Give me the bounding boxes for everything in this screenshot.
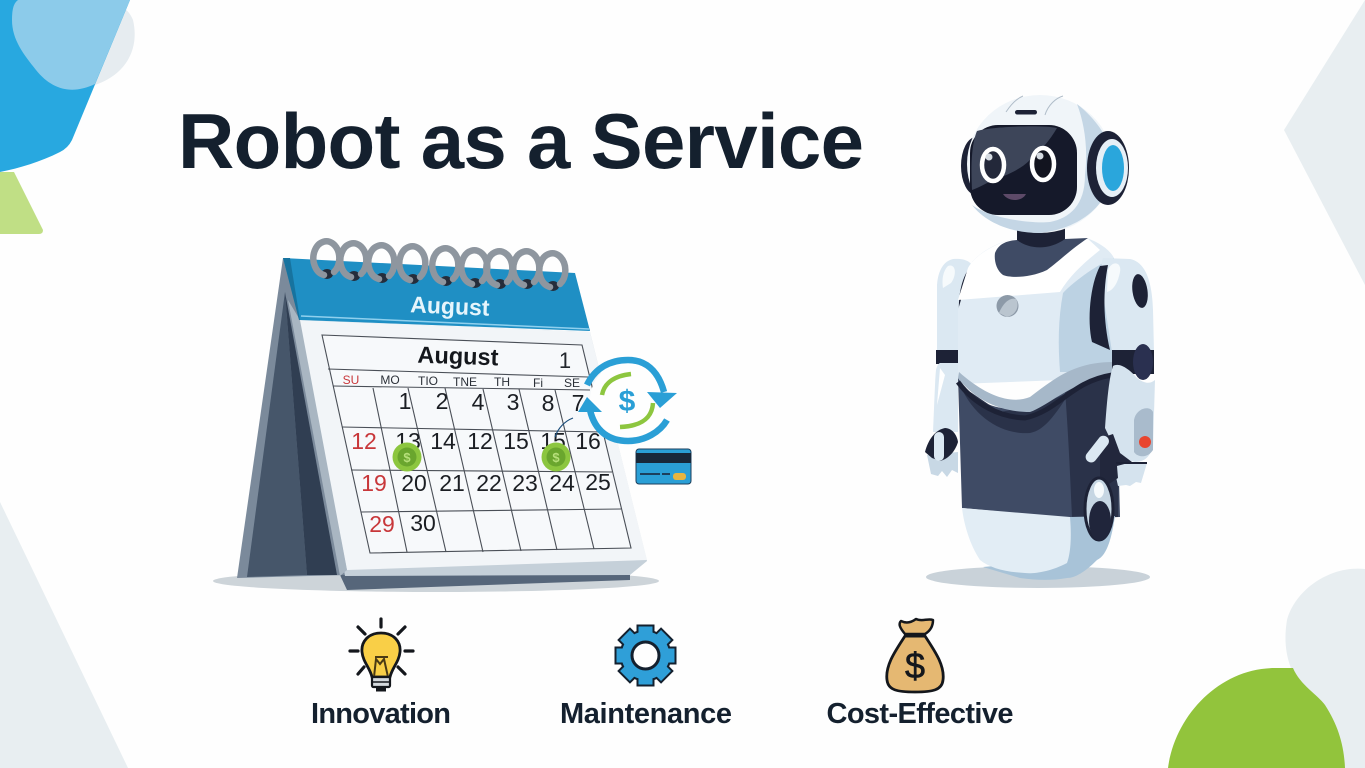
robot torso — [958, 238, 1114, 384]
robot illustration — [925, 95, 1155, 588]
calendar dates: 25 — [585, 469, 611, 495]
calendar dates: 15 — [540, 428, 566, 454]
calendar dates: 19 — [361, 470, 387, 496]
weekday labels: SE — [564, 376, 580, 390]
calendar dates: 2 — [436, 388, 448, 414]
robot left arm — [933, 259, 973, 432]
calendar dates: 23 — [512, 470, 538, 496]
weekday labels: MO — [380, 373, 400, 387]
calendar dates: 21 — [439, 470, 465, 496]
robot head — [961, 95, 1129, 233]
skirt dark side — [1065, 375, 1120, 518]
robot ear — [1087, 131, 1129, 205]
recurring payment icon — [578, 360, 677, 441]
calendar month heading: August — [417, 342, 499, 370]
calendar dates: 8 — [542, 390, 554, 416]
icon: money bag — [887, 619, 943, 692]
payment coin one — [392, 442, 422, 472]
calendar page number: 1 — [559, 348, 571, 373]
payment coin one: $ — [403, 450, 411, 465]
feature: maintenance — [560, 626, 732, 730]
calendar dates: 3 — [507, 389, 519, 415]
robot left hand — [925, 428, 958, 477]
top-right corner decoration — [1284, 0, 1365, 285]
calendar shadow — [213, 570, 659, 592]
icon: light bulb — [350, 619, 413, 692]
robot wheel — [1085, 478, 1113, 541]
robot smile — [1003, 194, 1026, 200]
robot right forearm — [1105, 365, 1155, 462]
robot collar — [995, 238, 1088, 277]
recurring payment icon: $ — [619, 385, 636, 418]
calendar dates: 30 — [410, 510, 436, 536]
robot right eye — [1032, 148, 1054, 180]
feature: innovation — [311, 619, 451, 730]
bottom-right corner decoration — [1168, 569, 1365, 768]
calendar dates: 29 — [369, 511, 395, 537]
icon: money bag: $ — [905, 645, 925, 686]
robot neck — [1017, 228, 1065, 249]
icon: gear — [616, 626, 674, 684]
calendar dates: 12 — [351, 428, 377, 454]
calendar dates: 4 — [472, 389, 485, 415]
calendar spiral rings — [313, 241, 565, 291]
label: cost-effective: Cost-Effective — [826, 698, 1014, 730]
label: maintenance: Maintenance — [560, 698, 732, 730]
robot left eye — [982, 149, 1004, 181]
calendar dates — [351, 388, 611, 537]
label: innovation: Innovation — [311, 698, 451, 730]
bottom-left corner decoration — [0, 502, 128, 768]
weekday labels: TIO — [418, 374, 438, 388]
title: Robot as a Service — [178, 97, 864, 185]
robot skirt — [958, 372, 1120, 518]
calendar dates: 15 — [503, 428, 529, 454]
calendar illustration — [213, 241, 691, 592]
payment pointer line — [555, 418, 573, 437]
payment coin two — [542, 442, 570, 472]
torso side shading — [1059, 258, 1114, 372]
robot right hand — [1083, 433, 1147, 490]
weekday labels — [343, 373, 580, 390]
calendar blue header — [283, 258, 590, 331]
calendar dates: 16 — [575, 428, 601, 454]
calendar page base — [288, 300, 647, 590]
calendar dates: 14 — [430, 428, 456, 454]
weekday labels: TNE — [453, 375, 477, 389]
calendar grid — [322, 335, 631, 553]
calendar dates: 22 — [476, 470, 502, 496]
chest button — [996, 295, 1018, 317]
calendar dates: 20 — [401, 470, 427, 496]
robot ground shadow — [926, 566, 1150, 588]
weekday labels: SU — [343, 373, 359, 387]
feature: cost-effective — [826, 619, 1014, 730]
weekday labels: TH — [494, 375, 510, 389]
calendar dates: 7 — [572, 390, 584, 416]
robot right arm — [1090, 258, 1154, 380]
calendar back stand — [237, 258, 347, 578]
calendar dates: 12 — [467, 428, 493, 454]
calendar blue header: August — [410, 291, 490, 321]
torso highlight — [958, 238, 1100, 300]
calendar dates: 13 — [395, 428, 421, 454]
waist wave band — [958, 362, 1113, 418]
calendar dates: 24 — [549, 470, 575, 496]
top-left corner decoration — [0, 0, 135, 234]
payment coin two: $ — [552, 450, 560, 465]
calendar dates: 1 — [399, 388, 411, 414]
weekday labels: Fi — [533, 376, 543, 390]
robot face screen — [970, 125, 1077, 215]
robot lower base — [962, 508, 1115, 580]
skirt dark wave — [960, 385, 1070, 433]
credit card icon — [636, 449, 691, 484]
